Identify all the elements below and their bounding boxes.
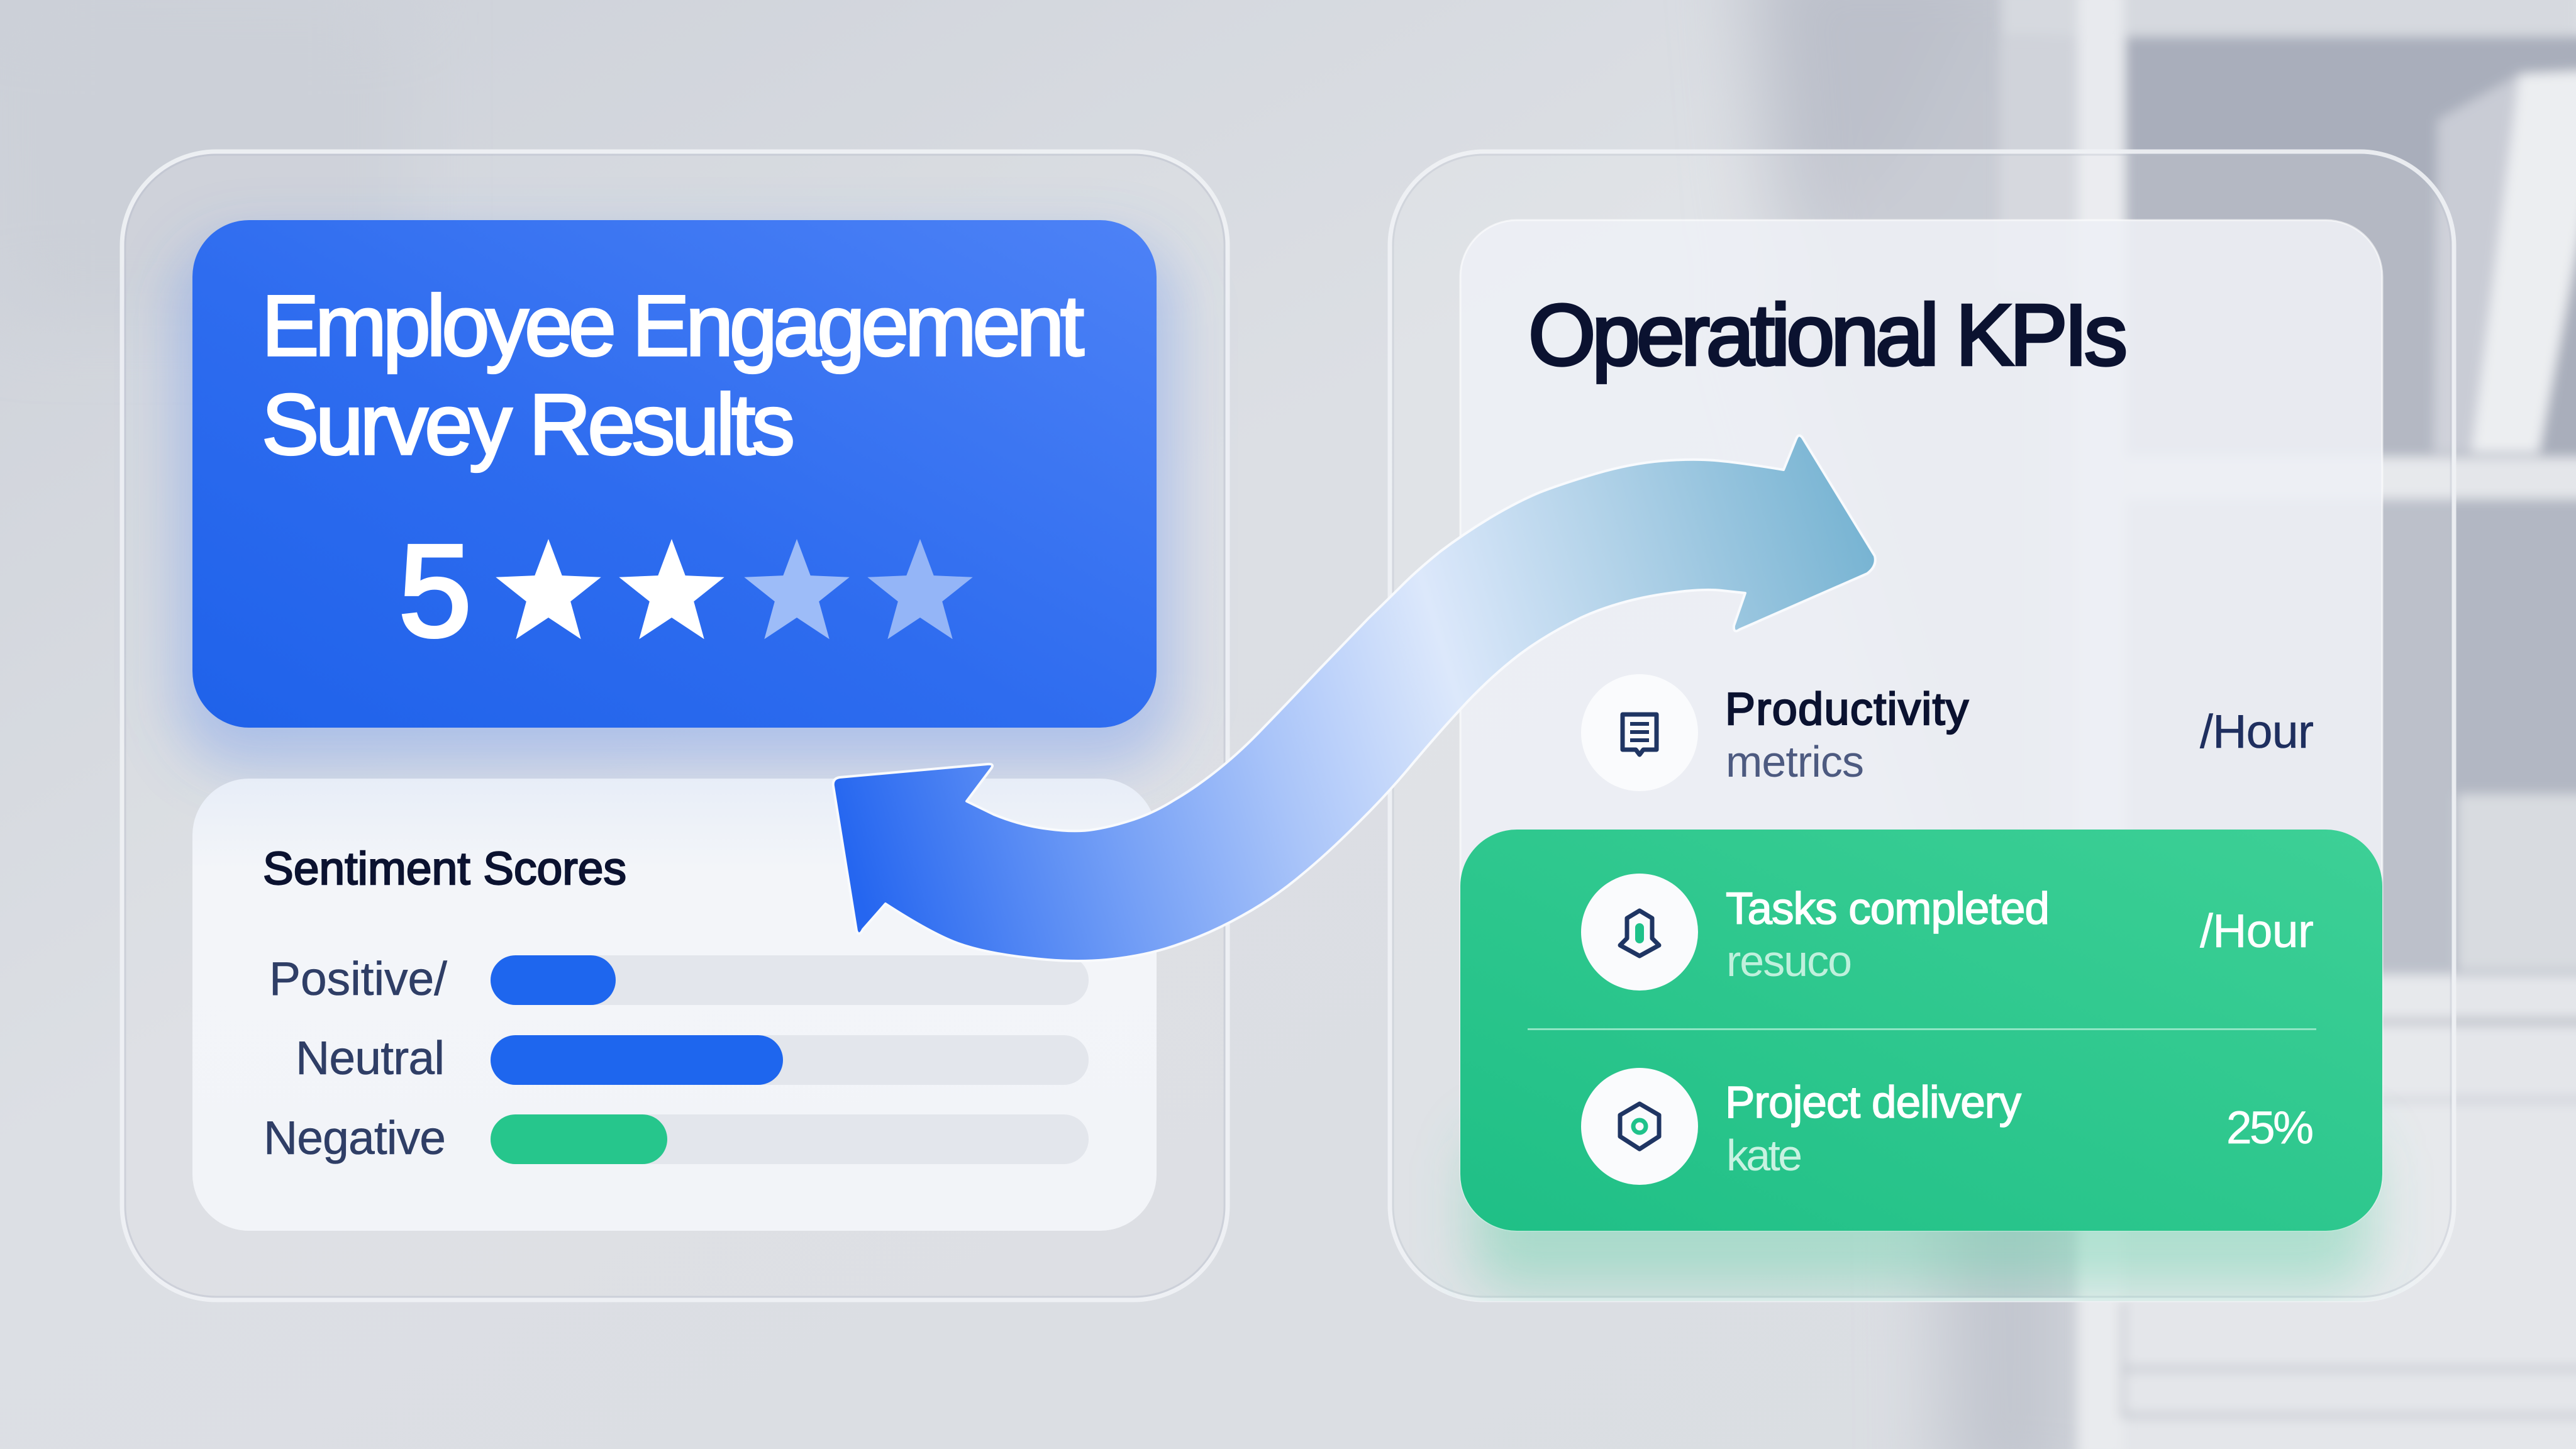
- glow: green card: [1472, 1132, 2371, 1289]
- KPI row: Tasks completed: Tasks completed: [1726, 884, 2050, 934]
- KPI row: Project delivery: Project delivery: [1725, 1078, 2021, 1128]
- glow: blue card: [176, 239, 1176, 767]
- bar row: Positive: Positive/: [269, 952, 447, 1005]
- bar row: Negative: Negative: [264, 1111, 446, 1164]
- KPI row: Tasks completed: [1581, 874, 2314, 991]
- bar row: Neutral: Neutral: [296, 1031, 445, 1084]
- KPI row: Productivity: /Hour: [2200, 705, 2314, 758]
- panel: survey results card: [192, 220, 1157, 728]
- panel: KPI card: [1460, 220, 2382, 1231]
- panel: Sentiment Scores card: [192, 779, 1157, 1231]
- rating: number 5: 5: [399, 518, 472, 664]
- bar row: Positive: [269, 952, 1089, 1005]
- heading: survey title: Employee Engagement: [262, 278, 1084, 374]
- KPI row: Project delivery: [1581, 1068, 2314, 1185]
- icon: hexagon: [1581, 1068, 1698, 1185]
- panel: right outer glass: [1390, 152, 2454, 1300]
- heading: Operational KPIs: Operational KPIs: [1528, 287, 2128, 384]
- divider: [1528, 1028, 2316, 1030]
- panel: green KPI block: [1460, 830, 2382, 1231]
- KPI row: Productivity: [1581, 674, 2314, 791]
- KPI row: Tasks completed: /Hour: [2200, 904, 2314, 957]
- icon: document: [1581, 674, 1698, 791]
- panel: left outer glass: [122, 152, 1228, 1300]
- bar row: Negative: [264, 1111, 1089, 1164]
- KPI row: Project delivery: kate: [1726, 1131, 1802, 1180]
- heading: Sentiment Scores: Sentiment Scores: [263, 843, 626, 894]
- KPI row: Productivity: metrics: [1726, 737, 1864, 786]
- KPI row: Tasks completed: resuco: [1726, 936, 1852, 985]
- bar row: Neutral: [296, 1031, 1089, 1085]
- KPI row: Productivity: Productivity: [1725, 684, 1968, 735]
- rating: stars: [496, 539, 973, 639]
- arrow: two-way curved arrow: [833, 435, 1875, 961]
- heading: survey title: Survey Results: [262, 377, 795, 473]
- KPI row: Project delivery: 25%: [2226, 1102, 2314, 1153]
- icon: bell badge: [1581, 874, 1698, 991]
